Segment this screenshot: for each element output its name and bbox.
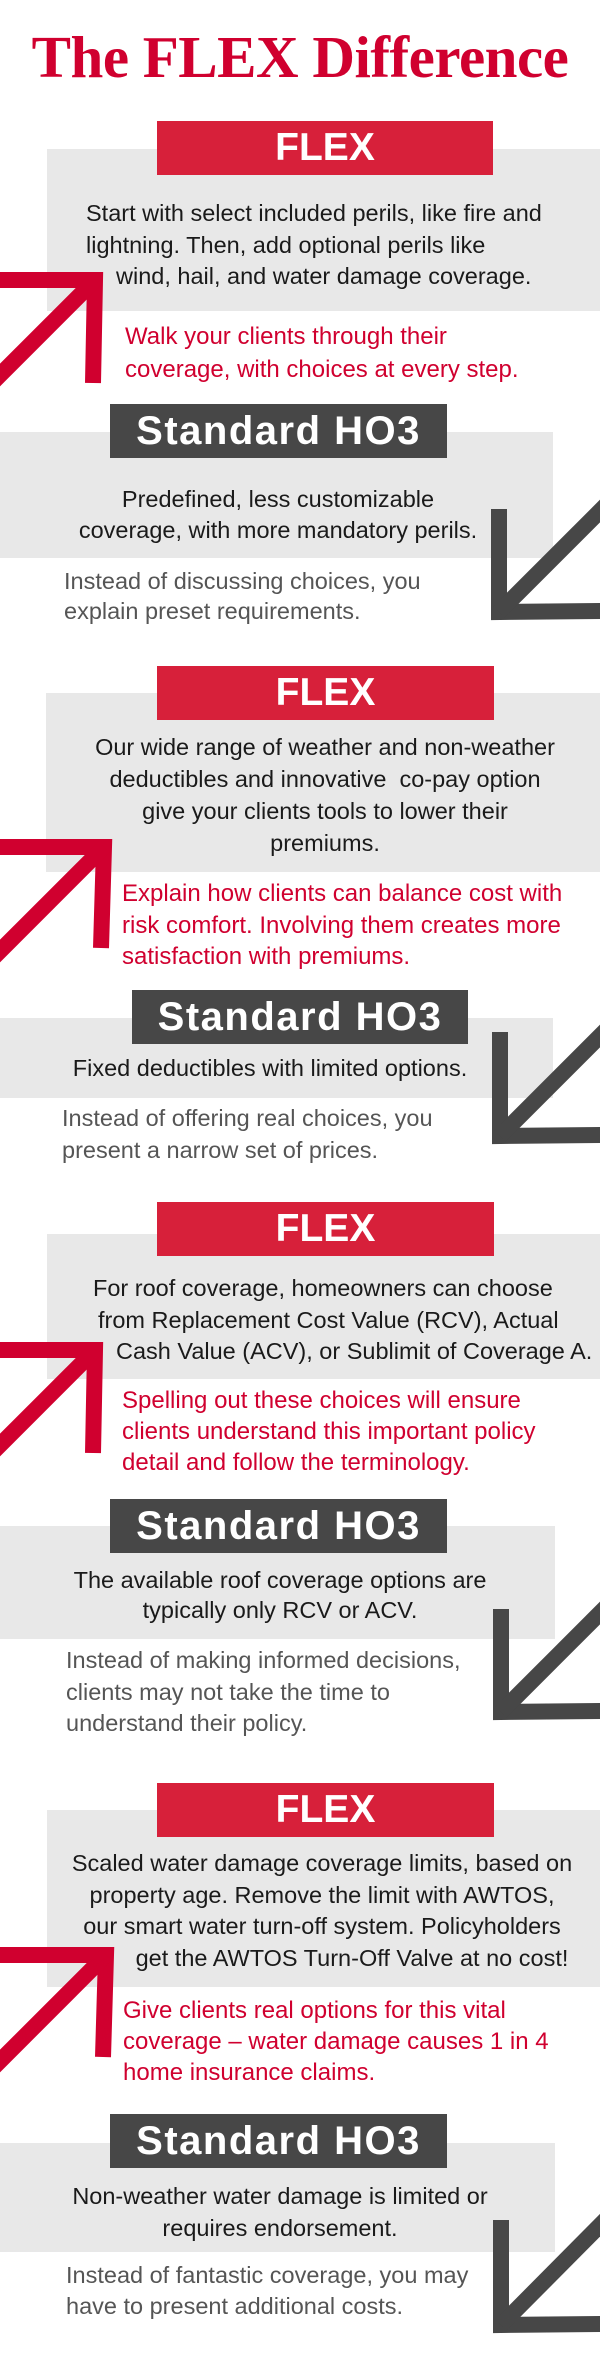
text: standard 2 description: Fixed deductibles with limited options. (73, 1055, 467, 1081)
text: standard 2 note: Instead of offering real choices, you (62, 1105, 433, 1131)
arrow: red up-right 4 (0, 1955, 106, 2105)
label: Standard HO3 1 (110, 404, 447, 458)
text: standard 2 note (62, 1105, 433, 1163)
label: Standard HO3 3 (110, 1499, 447, 1553)
title: The FLEX Difference (32, 24, 568, 90)
text: flex 4 tip (123, 1997, 549, 2086)
text: standard 3 description: The available roof coverage options are (74, 1567, 486, 1593)
label: FLEX 4 (157, 1783, 494, 1837)
text: standard 1 description: coverage, with more mandatory perils. (79, 517, 477, 543)
text: standard 4 note: Instead of fantastic coverage, you may (66, 2262, 468, 2288)
text: flex 1 description (86, 200, 542, 289)
arrow: dark down-left 1 (499, 471, 600, 612)
text: standard 4 note: have to present additional costs. (66, 2293, 403, 2319)
text: flex 3 tip (122, 1387, 536, 1476)
text: flex 2 description: deductibles and innovative co-pay option (109, 766, 541, 792)
text: flex 3 tip: clients understand this important policy (122, 1418, 536, 1445)
text: flex 2 description (95, 734, 555, 856)
label: FLEX 1: FLEX (275, 126, 375, 169)
text: standard 1 description: Predefined, less customizable (122, 486, 434, 512)
text: standard 1 description (79, 486, 477, 543)
text: flex 2 description: Our wide range of weather and non-weather (95, 734, 555, 760)
label: FLEX 3: FLEX (276, 1207, 375, 1250)
text: standard 4 note (66, 2262, 468, 2319)
text: flex 2 description: give your clients tools to lower their (142, 798, 508, 824)
text: flex 4 tip: Give clients real options for this vital (123, 1997, 506, 2024)
arrow: dark down-left 2 (500, 996, 600, 1136)
label: FLEX 1 (157, 121, 493, 175)
label: FLEX 2 (157, 666, 494, 720)
text: flex 2 description: premiums. (270, 830, 380, 856)
panel: flex 4 background (47, 1810, 600, 1987)
text: standard 3 note: clients may not take the time to (66, 1678, 390, 1704)
text: standard 3 description: typically only RCV or ACV. (143, 1597, 417, 1623)
text: flex 1 tip: coverage, with choices at every step. (125, 356, 519, 383)
panel: standard 3 background (0, 1526, 555, 1639)
text: flex 4 tip: home insurance claims. (123, 2059, 375, 2086)
arrow: red up-right 1 (0, 280, 95, 420)
text: standard 1 note: Instead of discussing choices, you (64, 568, 421, 594)
text: flex 1 tip: Walk your clients through their (125, 323, 447, 350)
text: standard 3 note: understand their policy. (66, 1710, 307, 1736)
label: Standard HO3 2 (132, 990, 468, 1044)
arrow: dark down-left 4 (501, 2185, 600, 2325)
label: Standard HO3 3: Standard HO3 (136, 1504, 421, 1548)
label: Standard HO3 4 (110, 2114, 447, 2168)
text: flex 4 description: our smart water turn-off system. Policyholders (83, 1913, 561, 1939)
text: standard 3 note: Instead of making informed decisions, (66, 1647, 460, 1673)
text: standard 1 note (64, 568, 421, 624)
text: standard 3 note (66, 1647, 460, 1736)
text: standard 3 description (74, 1567, 486, 1623)
text: standard 1 note: explain preset requirements. (64, 598, 361, 624)
label: FLEX 3 (157, 1202, 494, 1256)
panel: flex 2 background (46, 693, 600, 872)
text: standard 4 description: requires endorsement. (162, 2215, 398, 2241)
text: flex 4 description (72, 1850, 572, 1971)
text: flex 1 tip (125, 323, 519, 383)
text: flex 3 tip: Spelling out these choices will ensure (122, 1387, 521, 1414)
label: Standard HO3 1: Standard HO3 (136, 408, 421, 452)
arrow: red up-right 3 (0, 1350, 95, 1490)
text: flex 2 tip: satisfaction with premiums. (122, 943, 410, 970)
text: flex 4 description: get the AWTOS Turn-Off Valve at no cost! (136, 1944, 568, 1970)
panel: flex 1 background (47, 149, 600, 311)
label: Standard HO3 4: Standard HO3 (136, 2118, 421, 2162)
text: standard 4 description (72, 2183, 488, 2241)
panel: flex 3 background (47, 1234, 600, 1379)
text: flex 3 description (93, 1275, 592, 1364)
text: standard 4 description: Non-weather water damage is limited or (72, 2183, 488, 2209)
text: standard 2 note: present a narrow set of prices. (62, 1137, 378, 1163)
text: flex 2 tip: Explain how clients can balance cost with (122, 880, 562, 907)
text: flex 1 description: wind, hail, and water damage coverage. (116, 263, 531, 289)
text: flex 4 tip: coverage – water damage causes 1 in 4 (123, 2028, 549, 2055)
text: flex 1 description: Start with select included perils, like fire and (86, 200, 542, 226)
panel: standard 4 background (0, 2143, 555, 2252)
label: FLEX 2: FLEX (276, 671, 375, 714)
text: flex 4 description: property age. Remove the limit with AWTOS, (90, 1882, 554, 1908)
text: flex 3 description: from Replacement Cost Value (RCV), Actual (98, 1306, 559, 1332)
text: flex 3 tip: detail and follow the terminology. (122, 1449, 470, 1476)
label: Standard HO3 2: Standard HO3 (158, 994, 442, 1038)
panel: standard 2 background (0, 1018, 553, 1098)
label: FLEX 4: FLEX (276, 1788, 375, 1831)
text: flex 2 tip (122, 880, 562, 970)
text: flex 3 description: For roof coverage, homeowners can choose (93, 1275, 553, 1301)
text: flex 2 tip: risk comfort. Involving them creates more (122, 912, 561, 938)
panel: standard 1 background (0, 432, 553, 558)
arrow: dark down-left 3 (501, 1573, 600, 1712)
arrow: red up-right 2 (0, 847, 104, 997)
text: flex 4 description: Scaled water damage coverage limits, based on (72, 1850, 572, 1876)
text: flex 1 description: lightning. Then, add optional perils like (86, 232, 485, 258)
text: flex 3 description: Cash Value (ACV), or Sublimit of Coverage A. (116, 1338, 592, 1364)
